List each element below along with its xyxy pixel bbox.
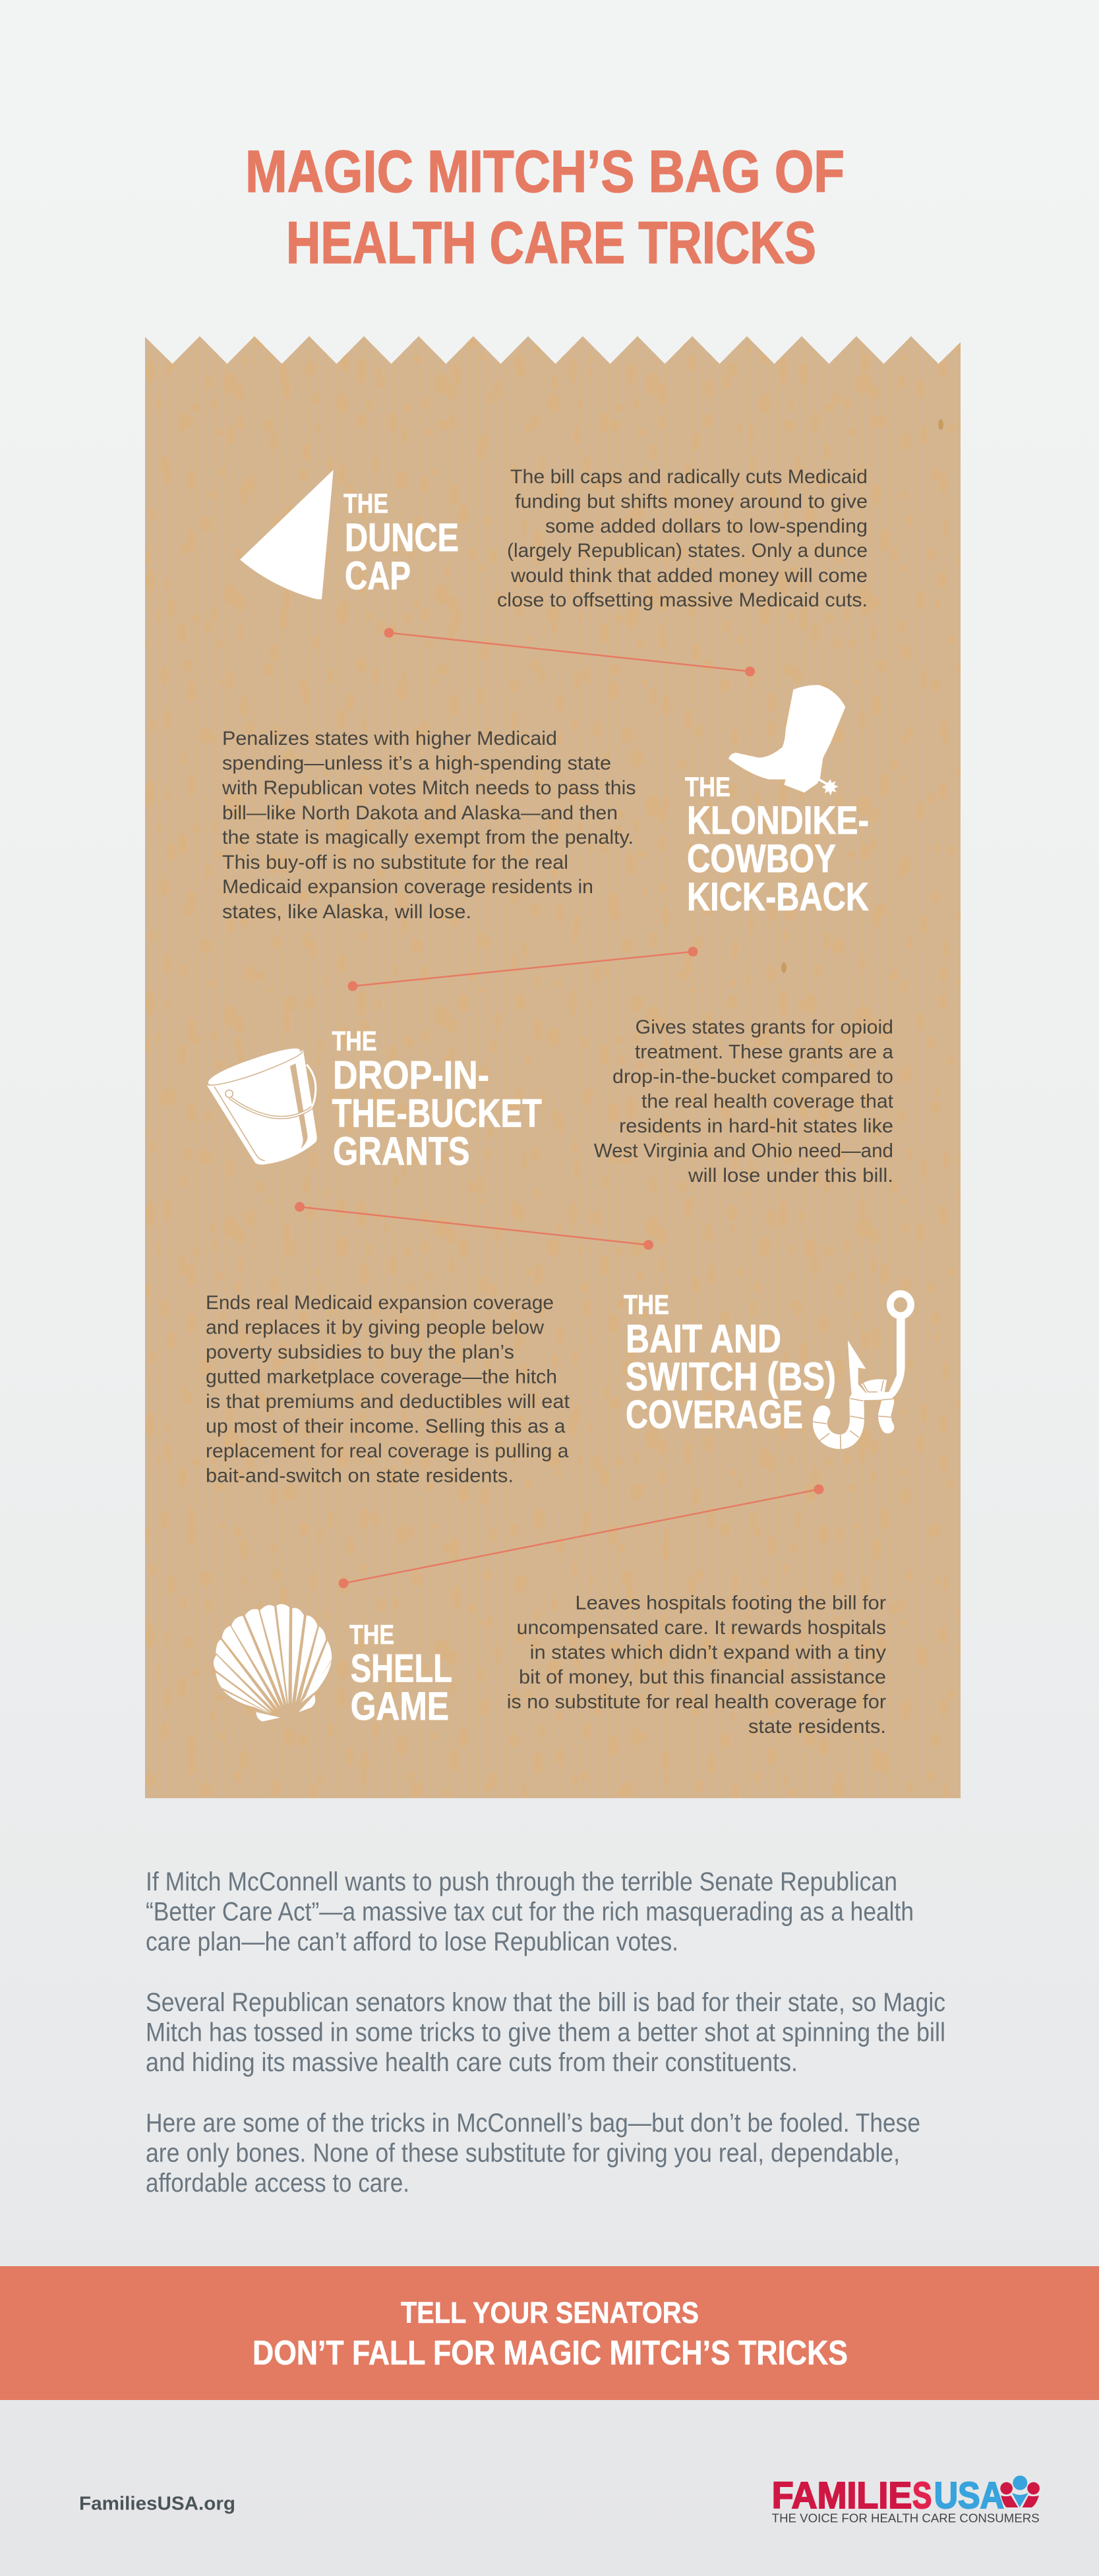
heading: drop-in-the-bucket grants: THE-BUCKET xyxy=(332,1092,542,1135)
call to action banner xyxy=(0,2266,1099,2400)
heading: the shell game xyxy=(349,1619,452,1728)
icon: cowboy boot with spur xyxy=(728,685,845,796)
section: klondike-cowboy kick-back xyxy=(222,685,869,923)
heading: drop-in-the-bucket grants: GRANTS xyxy=(333,1129,469,1173)
text: bucket description: will lose under this bill. xyxy=(688,1165,893,1186)
section: the shell game xyxy=(214,1592,886,1738)
heading: bait and switch coverage xyxy=(624,1289,836,1437)
heading: the dunce cap: THE xyxy=(343,488,388,519)
text: bucket description: Gives states grants for opioid xyxy=(636,1016,893,1038)
text: bucket description: West Virginia and Ohio need—and xyxy=(594,1140,893,1161)
heading: drop-in-the-bucket grants: THE xyxy=(332,1026,377,1057)
text block: intro paragraphs: are only bones. None of these substitute for giving you real, dependable, xyxy=(146,2139,900,2168)
heading: bait and switch coverage: COVERAGE xyxy=(626,1392,803,1437)
text: dunce cap description: would think that added money will come xyxy=(510,565,868,587)
logo: families usa: FAMILIE xyxy=(772,2474,912,2517)
heading: the shell game: SHELL xyxy=(351,1647,452,1691)
text: klondike description: bill—like North Dakota and Alaska—and then xyxy=(222,802,618,824)
title: MAGIC MITCH’S BAG OF xyxy=(245,139,845,205)
text: klondike description: states, like Alaska, will lose. xyxy=(222,901,471,923)
text: bait and switch description: bait-and-switch on state residents. xyxy=(206,1465,514,1487)
text block: intro paragraphs: care plan—he can’t afford to lose Republican votes. xyxy=(146,1927,678,1956)
title xyxy=(245,139,845,276)
logo: families usa xyxy=(772,2474,1040,2525)
text block: intro paragraphs: “Better Care Act”—a massive tax cut for the rich masquerading as a health xyxy=(146,1898,914,1927)
call to action banner: TELL YOUR SENATORS xyxy=(401,2296,699,2329)
text: shell game description: bit of money, but this financial assistance xyxy=(519,1666,886,1688)
heading: klondike-cowboy kick-back: THE xyxy=(685,771,730,802)
text: bucket description: residents in hard-hit states like xyxy=(619,1115,893,1137)
icon: dunce cap xyxy=(240,470,334,599)
text: klondike description: Medicaid expansion coverage residents in xyxy=(222,876,593,898)
heading: klondike-cowboy kick-back: KICK-BACK xyxy=(687,875,869,919)
call to action banner: DON’T FALL FOR MAGIC MITCH’S TRICKS xyxy=(252,2334,848,2372)
text block: intro paragraphs xyxy=(146,1867,945,2198)
logo: families usa: USA xyxy=(934,2474,1004,2517)
text: bucket description xyxy=(594,1016,894,1186)
text: bait and switch description: replacement for real coverage is pulling a xyxy=(206,1440,569,1462)
text: bait and switch description: up most of their income. Selling this as a xyxy=(206,1416,566,1438)
section: drop-in-the-bucket grants xyxy=(207,1016,894,1186)
heading: drop-in-the-bucket grants xyxy=(332,1026,542,1173)
icon: scallop shell xyxy=(214,1604,332,1722)
text: dunce cap description: funding but shifts money around to give xyxy=(515,491,868,513)
text block: intro paragraphs: affordable access to care. xyxy=(146,2169,409,2198)
text block: intro paragraphs: Here are some of the tricks in McConnell’s bag—but don’t be fooled. These xyxy=(146,2109,920,2138)
text: klondike description: This buy-off is no substitute for the real xyxy=(222,852,568,873)
heading: the dunce cap: DUNCE xyxy=(345,515,459,560)
heading: klondike-cowboy kick-back: COWBOY xyxy=(687,836,836,881)
heading: klondike-cowboy kick-back: KLONDIKE- xyxy=(687,798,869,842)
text block: intro paragraphs: and hiding its massive health care cuts from their constituents. xyxy=(146,2048,798,2077)
heading: klondike-cowboy kick-back xyxy=(685,771,869,919)
text: dunce cap description: The bill caps and radically cuts Medicaid xyxy=(510,466,868,488)
connector line 2 xyxy=(348,947,698,991)
text: bait and switch description: and replaces it by giving people below xyxy=(206,1317,544,1338)
text: dunce cap description: some added dollars to low-spending xyxy=(545,515,868,537)
text: bucket description: treatment. These grants are a xyxy=(635,1041,893,1063)
text block: intro paragraphs: Mitch has tossed in some tricks to give them a better shot at spinning the bill xyxy=(146,2018,945,2047)
text block: intro paragraphs: If Mitch McConnell wants to push through the terrible Senate Republican xyxy=(146,1867,897,1896)
heading: the shell game: THE xyxy=(349,1619,394,1650)
text block: intro paragraphs: Several Republican senators know that the bill is bad for their state, so Magic xyxy=(146,1988,945,2017)
text: bucket description: drop-in-the-bucket compared to xyxy=(612,1066,893,1088)
icon: hook and worm xyxy=(812,1294,911,1449)
text: bucket description: the real health coverage that xyxy=(641,1090,894,1113)
website url: FamiliesUSA.org xyxy=(79,2494,235,2515)
text: bait and switch description: is that premiums and deductibles will eat xyxy=(206,1391,570,1413)
text: shell game description: is no substitute for real health coverage for xyxy=(507,1691,886,1713)
section: the dunce cap xyxy=(240,466,868,611)
panel: paper bag xyxy=(145,336,961,1798)
text: klondike description: with Republican votes Mitch needs to pass this xyxy=(222,777,636,799)
heading: the shell game: GAME xyxy=(351,1684,449,1728)
text: shell game description: uncompensated care. It rewards hospitals xyxy=(517,1617,886,1639)
text: dunce cap description xyxy=(497,466,868,611)
logo: families usa: S xyxy=(912,2474,932,2517)
text: dunce cap description: (largely Republican) states. Only a dunce xyxy=(507,540,868,562)
heading: bait and switch coverage: THE xyxy=(624,1289,669,1320)
text: klondike description: the state is magically exempt from the penalty. xyxy=(222,827,634,848)
heading: drop-in-the-bucket grants: DROP-IN- xyxy=(333,1053,489,1097)
text: klondike description xyxy=(222,728,636,923)
text: klondike description: Penalizes states with higher Medicaid xyxy=(222,728,557,749)
heading: the dunce cap: CAP xyxy=(345,554,411,598)
heading: bait and switch coverage: BAIT AND xyxy=(626,1317,781,1361)
text: shell game description xyxy=(507,1592,886,1738)
icon: bucket xyxy=(207,1049,317,1165)
heading: the dunce cap xyxy=(343,488,459,598)
connector line 3 xyxy=(295,1202,653,1250)
connector line 4 xyxy=(339,1484,824,1589)
text: shell game description: in states which didn’t expand with a tiny xyxy=(530,1641,886,1664)
text: dunce cap description: close to offsetting massive Medicaid cuts. xyxy=(497,589,868,611)
heading: bait and switch coverage: SWITCH (BS) xyxy=(626,1355,836,1399)
text: bait and switch description: Ends real Medicaid expansion coverage xyxy=(206,1292,554,1314)
title: HEALTH CARE TRICKS xyxy=(286,210,816,276)
text: bait and switch description: poverty subsidies to buy the plan’s xyxy=(206,1341,514,1363)
connector line 1 xyxy=(384,628,755,676)
text: shell game description: Leaves hospitals footing the bill for xyxy=(575,1592,886,1614)
section: bait and switch coverage xyxy=(206,1289,911,1487)
text: klondike description: spending—unless it’s a high-spending state xyxy=(222,753,611,774)
text: shell game description: state residents. xyxy=(748,1716,886,1738)
text: bait and switch description xyxy=(206,1292,570,1487)
text: bait and switch description: gutted marketplace coverage—the hitch xyxy=(206,1366,557,1388)
logo: families usa: THE VOICE FOR HEALTH CARE CONSUMERS xyxy=(772,2511,1040,2525)
